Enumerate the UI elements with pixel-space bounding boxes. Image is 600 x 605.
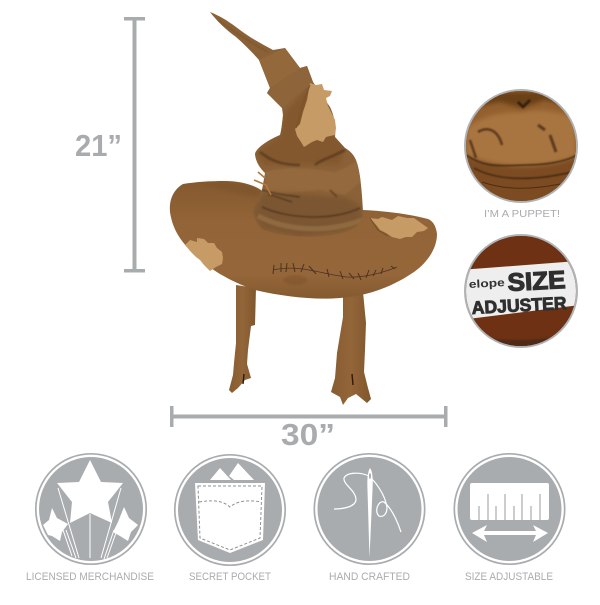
width label: 30” (281, 417, 335, 452)
badge: licensed merchandise (36, 454, 146, 564)
crown (210, 12, 363, 237)
icon: ruler (470, 483, 549, 520)
crown patch (295, 83, 336, 147)
icon: needle and thread (334, 468, 401, 558)
badge: secret pocket (175, 455, 285, 565)
badge: hand crafted (314, 454, 425, 564)
icon: pocket (195, 463, 265, 553)
detail circle: puppet mouth (464, 89, 578, 205)
badge label: HAND CRAFTED (329, 571, 410, 583)
icon: stars (43, 460, 138, 541)
sorting hat photo illustration (170, 12, 437, 405)
crown rope knot (254, 172, 271, 195)
height label: 21” (75, 128, 122, 163)
badge label: SECRET POCKET (189, 571, 271, 583)
brim stitches (273, 263, 397, 280)
left hanging leg (229, 285, 256, 393)
brim (170, 181, 437, 299)
crown folds and shading (253, 82, 363, 237)
height dimension bar (124, 17, 145, 272)
badge label: SIZE ADJUSTABLE (465, 571, 553, 583)
left brim patch (185, 238, 223, 271)
detail circle: size adjuster tag: SIZE (507, 266, 566, 297)
detail circle: size adjuster tag: elope (469, 277, 505, 291)
width dimension bar (170, 406, 448, 427)
badge label: LICENSED MERCHANDISE (26, 571, 154, 583)
detail circle: size adjuster tag (460, 234, 580, 350)
detail circle: size adjuster tag: ADJUSTER (471, 293, 567, 318)
right hanging leg (331, 292, 371, 405)
right brim patch (370, 216, 428, 239)
badge: size adjustable (454, 454, 565, 564)
icon: double arrow (472, 525, 548, 542)
size adjuster label (466, 262, 576, 318)
detail caption: I’M A PUPPET! (484, 208, 560, 220)
